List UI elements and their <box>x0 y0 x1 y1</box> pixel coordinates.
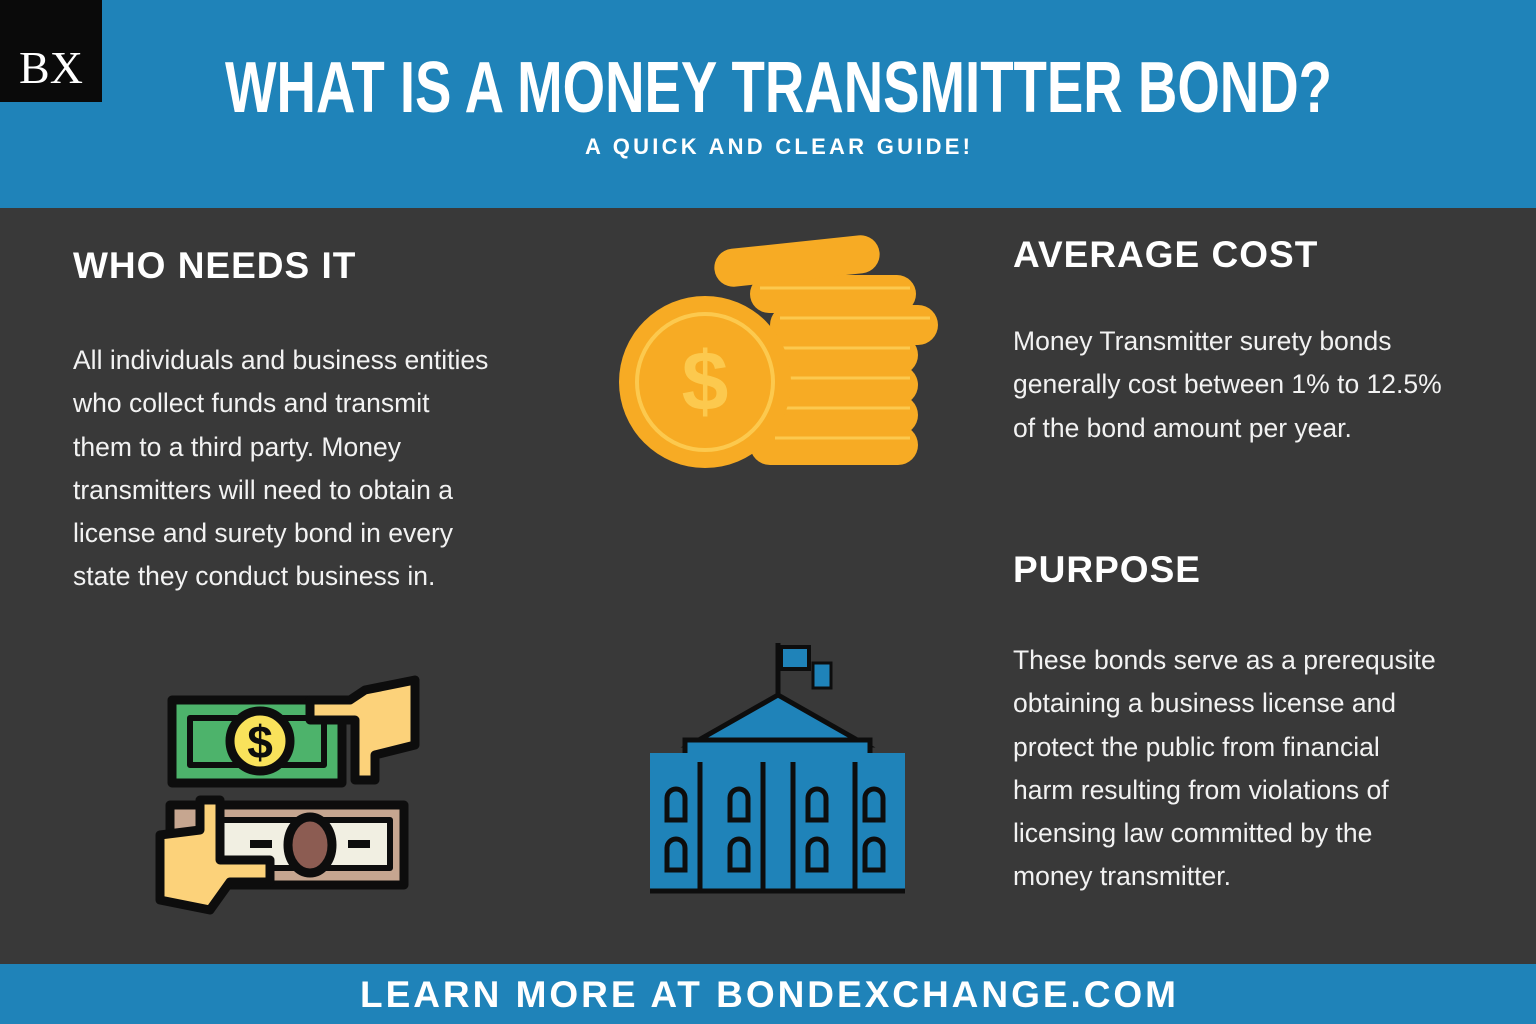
title: A QUICK AND CLEAR GUIDE! <box>585 134 970 159</box>
panel: who needs it heading: WHO NEEDS IT <box>73 245 356 286</box>
panel: average cost text <box>1013 326 1442 443</box>
header band <box>0 0 1536 208</box>
panel: purpose text: These bonds serve as a prerequsite <box>1013 645 1436 675</box>
icon: hands exchanging money: $ <box>247 716 273 768</box>
title <box>225 48 1332 159</box>
panel: who needs it text: license and surety bond in every <box>73 518 453 548</box>
logo BX: BX <box>19 42 83 93</box>
panel: purpose text: money transmitter. <box>1013 861 1231 891</box>
panel: purpose text: licensing law committed by the <box>1013 818 1372 848</box>
footer band <box>0 964 1536 1024</box>
footer text: LEARN MORE AT BONDEXCHANGE.COM <box>360 974 1176 1015</box>
panel: who needs it text: who collect funds and transmit <box>73 388 429 418</box>
panel: who needs it text: state they conduct business in. <box>73 561 435 591</box>
panel: purpose text <box>1013 645 1436 891</box>
panel: average cost text: Money Transmitter surety bonds <box>1013 326 1392 356</box>
panel: purpose heading: PURPOSE <box>1013 549 1201 590</box>
icon: government building <box>650 643 905 894</box>
panel: who needs it text: All individuals and business entities <box>73 345 488 375</box>
panel: purpose text: protect the public from financial <box>1013 732 1380 762</box>
panel: who needs it text <box>73 345 488 591</box>
panel: who needs it text: transmitters will need to obtain a <box>73 475 453 505</box>
panel: average cost text: of the bond amount per year. <box>1013 413 1352 443</box>
panel: purpose text: harm resulting from violations of <box>1013 775 1389 805</box>
logo BX <box>0 0 102 102</box>
icon: coins <box>619 235 938 468</box>
panel: purpose text: obtaining a business license and <box>1013 688 1396 718</box>
panel: average cost heading: AVERAGE COST <box>1013 234 1318 275</box>
icon: coins: $ <box>682 334 728 428</box>
panel: who needs it text: them to a third party. Money <box>73 432 401 462</box>
panel: average cost text: generally cost between 1% to 12.5% <box>1013 369 1442 399</box>
icon: hands exchanging money <box>156 676 420 914</box>
